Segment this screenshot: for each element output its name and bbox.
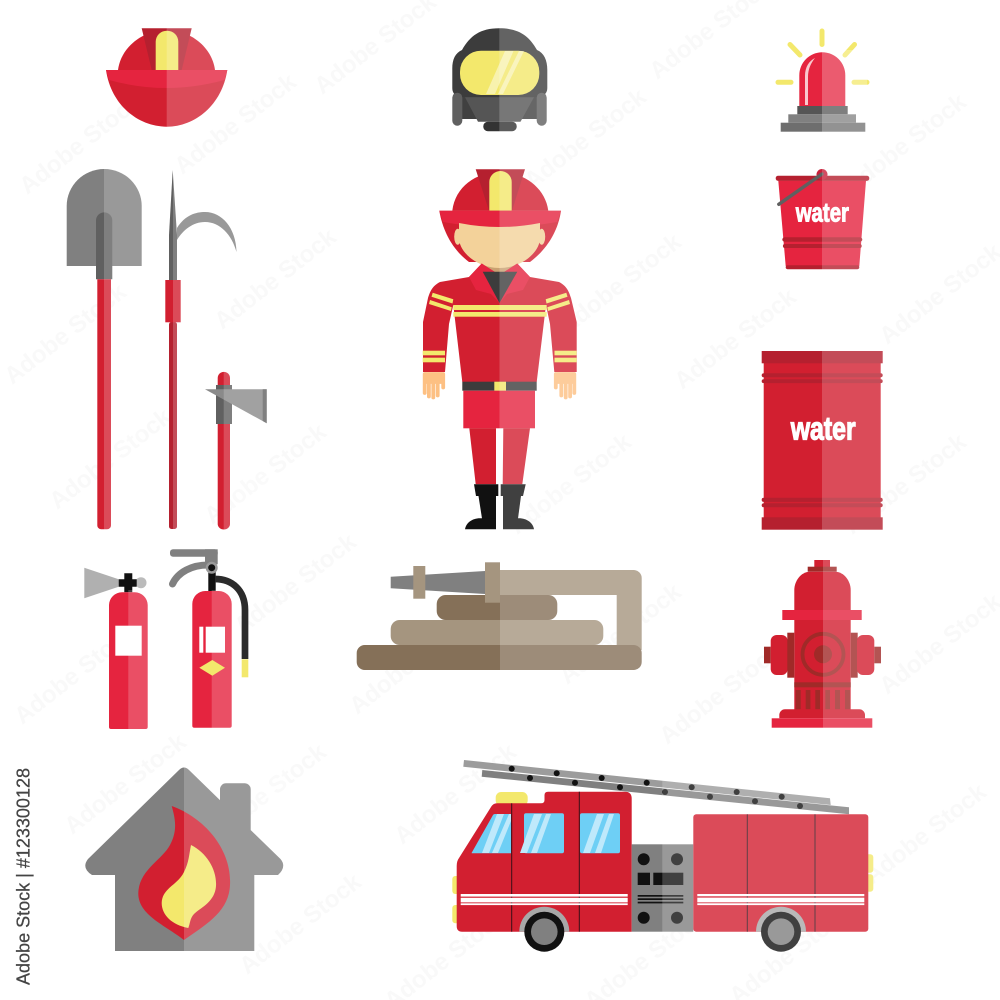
watermark layer: Adobe Stock: [669, 283, 802, 395]
pump section: [632, 844, 693, 932]
hands: [425, 374, 574, 398]
cab: [457, 792, 632, 932]
icon: water barrel: water: [790, 410, 856, 446]
icon: axe: [205, 370, 268, 532]
icon: breathing mask: [452, 25, 549, 133]
icon: alarm beacon: [778, 31, 867, 133]
icon: water bucket: [776, 168, 870, 270]
watermark layer: Adobe Stock: [0, 278, 132, 390]
watermark layer: Adobe Stock: [234, 868, 367, 980]
watermark layer: Adobe Stock: [504, 428, 637, 540]
watermark layer: Adobe Stock: [209, 223, 342, 335]
watermark layer: Adobe Stock: [839, 428, 972, 540]
watermark layer: Adobe Stock: [519, 83, 652, 195]
watermark layer: Adobe Stock: [344, 608, 477, 720]
icon: burning house: [85, 765, 286, 953]
collar: [469, 264, 530, 303]
icon: pike pole: [165, 165, 238, 532]
icon: water bucket: water: [795, 198, 849, 228]
face: [454, 223, 545, 274]
watermark layer: Adobe Stock: [389, 738, 522, 850]
icon: water barrel: [762, 350, 884, 531]
belt buckle: [494, 382, 506, 391]
watermark layer: Adobe Stock: [169, 68, 302, 180]
icon: shovel: [67, 165, 144, 531]
icon: fire helmet: [106, 25, 229, 129]
watermark layer: Adobe Stock: [654, 638, 787, 750]
watermark layer: Adobe Stock: [554, 228, 687, 340]
watermark layer: Adobe Stock: [44, 403, 177, 515]
icon: firefighter: [423, 165, 580, 531]
icon: extinguisher with cone: [84, 568, 148, 730]
cab windows: [472, 813, 620, 853]
reflective stripes: [423, 293, 577, 362]
jacket: [423, 264, 577, 382]
belt: [462, 382, 537, 391]
icon: coiled fire hose: [357, 560, 643, 672]
boots: [465, 484, 534, 529]
stock id vertical text: Adobe Stock | #123300128: [14, 768, 34, 985]
watermark layer: Adobe Stock: [59, 728, 192, 840]
watermark layer: Adobe Stock: [554, 578, 687, 690]
legs: [469, 428, 530, 484]
watermark layer: Adobe Stock: [14, 88, 147, 200]
shirt: [483, 272, 517, 303]
watermark layer: Adobe Stock: [199, 418, 332, 530]
yellow lights: [452, 792, 873, 923]
watermark layer: Adobe Stock: [859, 778, 992, 890]
white side stripes: [461, 894, 864, 905]
icon: extinguisher with hose: [170, 549, 248, 729]
icon: fire hydrant: [764, 558, 883, 730]
rear wheel: [756, 907, 806, 952]
front wheel: [519, 907, 569, 952]
door lines: [511, 792, 816, 932]
watermark layer: Adobe Stock: [839, 88, 972, 200]
helmet: [439, 169, 561, 262]
watermark layer: Adobe Stock: [9, 618, 142, 730]
watermark layer: Adobe Stock: [229, 528, 362, 640]
icon: fire truck: [452, 760, 874, 954]
coat skirt: [463, 391, 535, 428]
watermark layer: Adobe Stock: [199, 738, 332, 850]
ladder: [463, 760, 849, 814]
rear body: [693, 814, 868, 932]
